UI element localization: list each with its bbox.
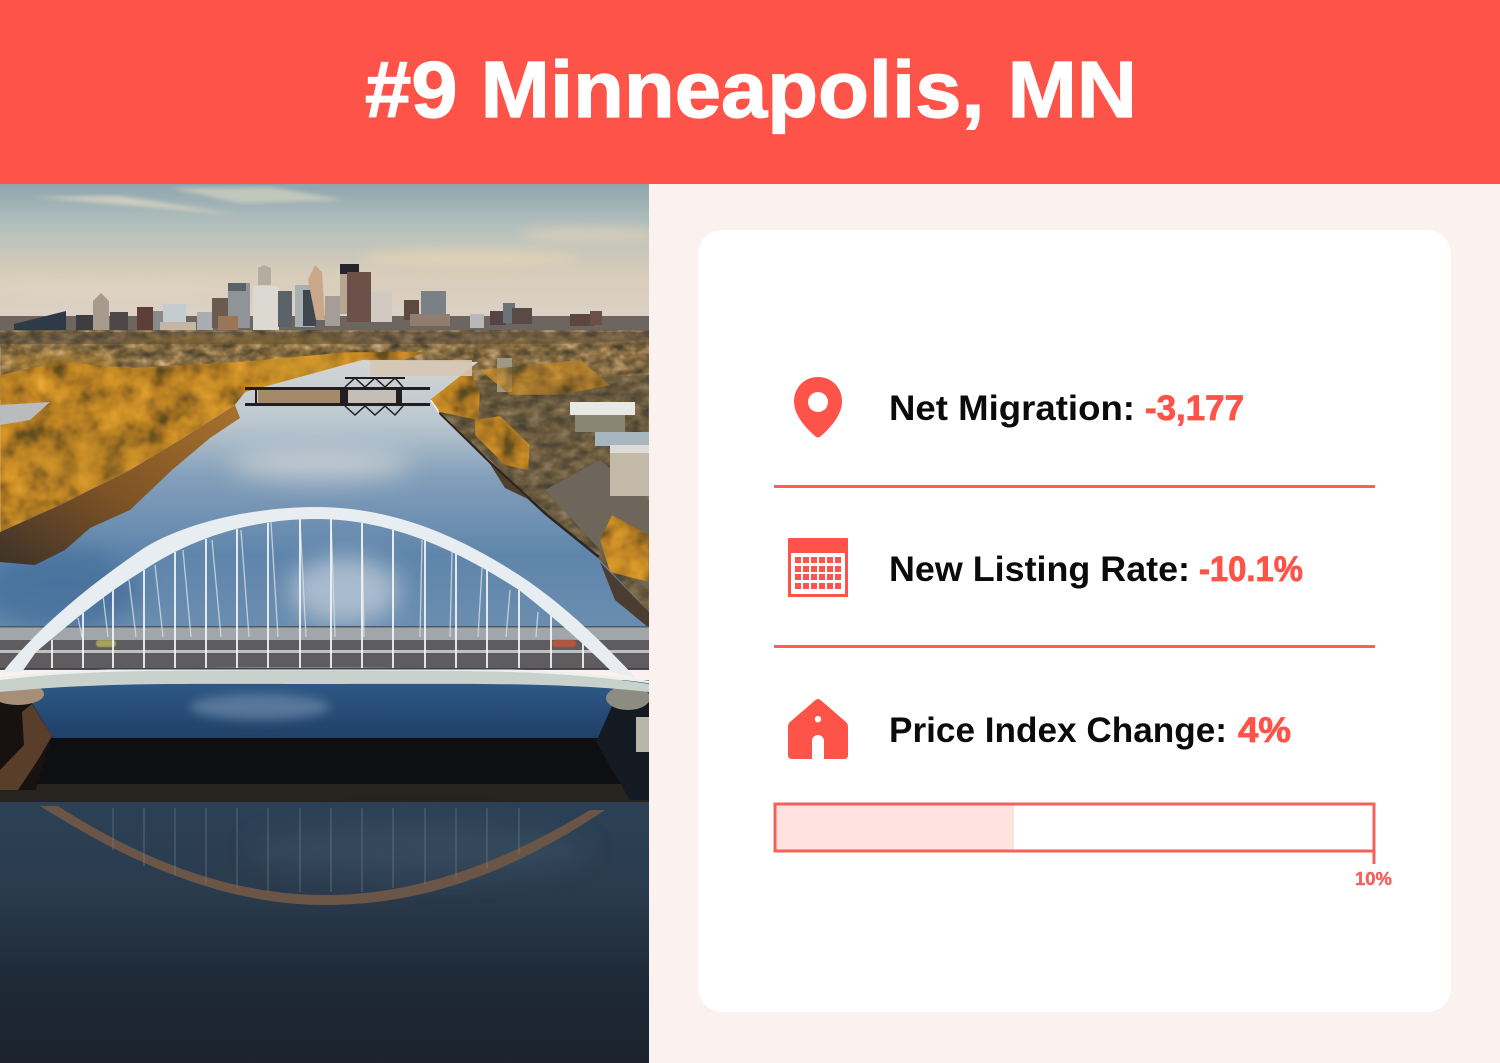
title: #9 Minneapolis, MN — [365, 45, 1137, 134]
river with sky reflection — [0, 360, 649, 640]
label: price index change: Price Index Change: — [889, 711, 1227, 750]
header banner — [0, 0, 1500, 184]
right bank land and buildings — [428, 340, 649, 612]
label: net migration: Net Migration: — [889, 389, 1135, 428]
value: net migration: -3,177 — [1145, 389, 1244, 428]
white arch of the bridge — [2, 507, 636, 678]
autumn tree canopy, left bank — [0, 352, 425, 532]
bridge deck and roadway — [0, 626, 649, 692]
tree reflection on water — [0, 405, 240, 565]
lower water with bridge reflection — [0, 802, 649, 1063]
icon: location pin — [794, 377, 842, 438]
scale label: 10% — [1355, 869, 1392, 889]
bridge shadow band — [0, 738, 649, 804]
rear bridge hangers — [78, 520, 538, 637]
stat row: net migration — [794, 377, 1244, 438]
divider — [774, 645, 1375, 648]
stat row: price index change — [788, 699, 1291, 759]
town and trees mid-distance — [0, 330, 649, 400]
white stats card — [698, 230, 1451, 1012]
stat row: new listing rate — [788, 538, 1303, 597]
water beneath the bridge — [0, 680, 649, 740]
value: price index change: 4% — [1238, 711, 1291, 750]
icon: calendar — [788, 538, 848, 597]
bridge piers — [0, 683, 650, 800]
value: new listing rate: -10.1% — [1199, 550, 1303, 589]
city skyline — [0, 264, 649, 346]
progress bar: price index 4% of 10% — [775, 803, 1392, 889]
railroad truss bridge — [245, 377, 430, 415]
icon: house — [788, 699, 848, 759]
photo: Minneapolis skyline and Lowry Avenue bridge — [0, 184, 660, 1063]
front bridge hangers — [52, 519, 583, 668]
divider — [774, 485, 1375, 488]
label: new listing rate: New Listing Rate: — [889, 550, 1190, 589]
sky — [0, 184, 660, 324]
